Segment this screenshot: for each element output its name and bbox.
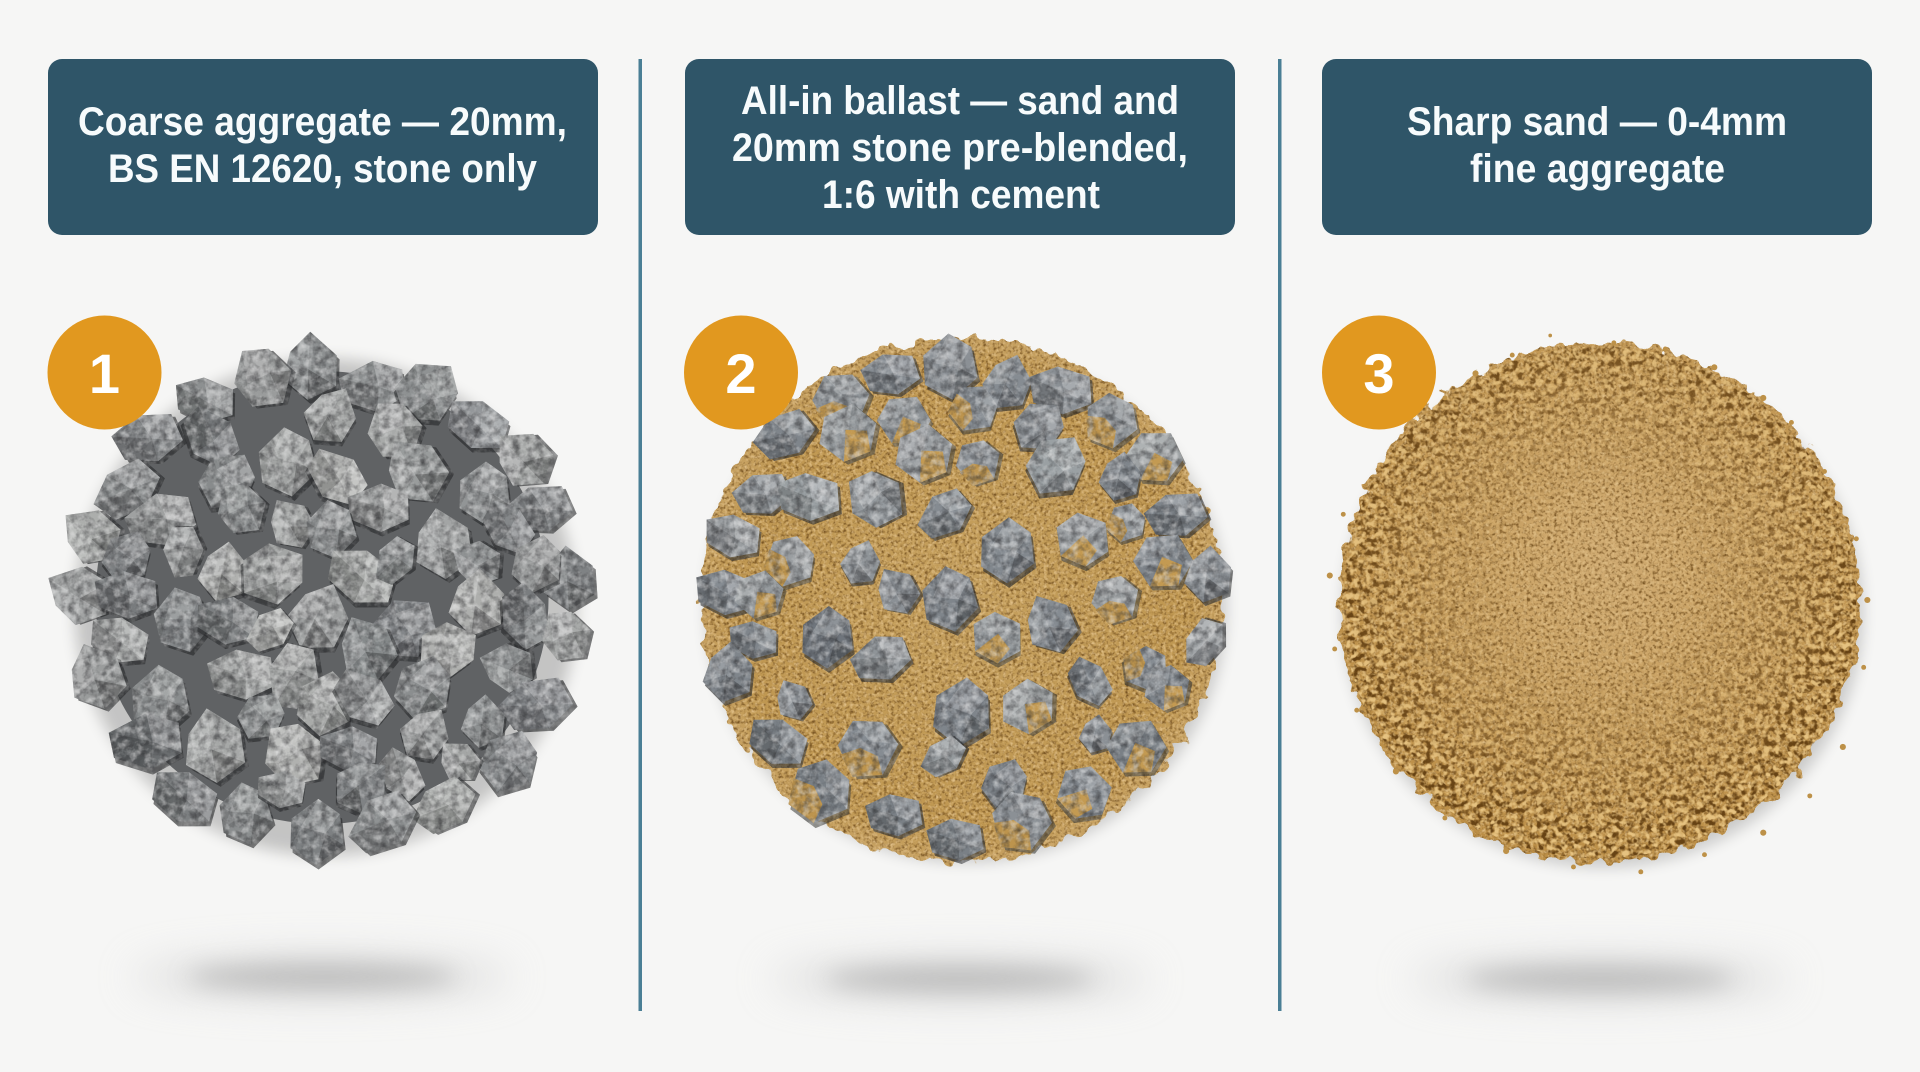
- floating shadow 1: [132, 955, 512, 999]
- sand pile: [1327, 334, 1870, 874]
- header: sharp sand: fine aggregate: [1470, 147, 1725, 191]
- header: sharp sand: Sharp sand — 0-4mm: [1407, 100, 1787, 144]
- header: all-in ballast: [685, 59, 1235, 235]
- number badge 3: [1322, 316, 1436, 430]
- number badge 1: 1: [89, 342, 120, 405]
- header: all-in ballast: All-in ballast — sand and: [741, 79, 1179, 123]
- header: sharp sand: [1322, 59, 1872, 235]
- floating shadow 3: [1410, 957, 1790, 1001]
- stone pile: [36, 329, 602, 876]
- panel: all-in ballast: [684, 59, 1242, 1001]
- header: coarse aggregate: BS EN 12620, stone only: [108, 147, 538, 191]
- divider 2: [1278, 59, 1282, 1011]
- ballast pile: sand and stone: [688, 329, 1242, 866]
- number badge 3: 3: [1363, 342, 1395, 405]
- scattered sand grains: [1327, 334, 1870, 874]
- number badge 1: [48, 316, 162, 430]
- number badge 2: [684, 316, 798, 430]
- header: coarse aggregate: Coarse aggregate — 20mm,: [78, 100, 567, 144]
- floating shadow 2: [770, 957, 1150, 1001]
- panel: sharp sand: [1322, 59, 1872, 1001]
- divider 1: [638, 59, 642, 1011]
- header: all-in ballast: 1:6 with cement: [822, 173, 1100, 217]
- panel: coarse aggregate: [36, 59, 602, 999]
- header: coarse aggregate: [48, 59, 598, 235]
- header: all-in ballast: 20mm stone pre-blended,: [732, 126, 1188, 170]
- number badge 2: 2: [725, 342, 757, 405]
